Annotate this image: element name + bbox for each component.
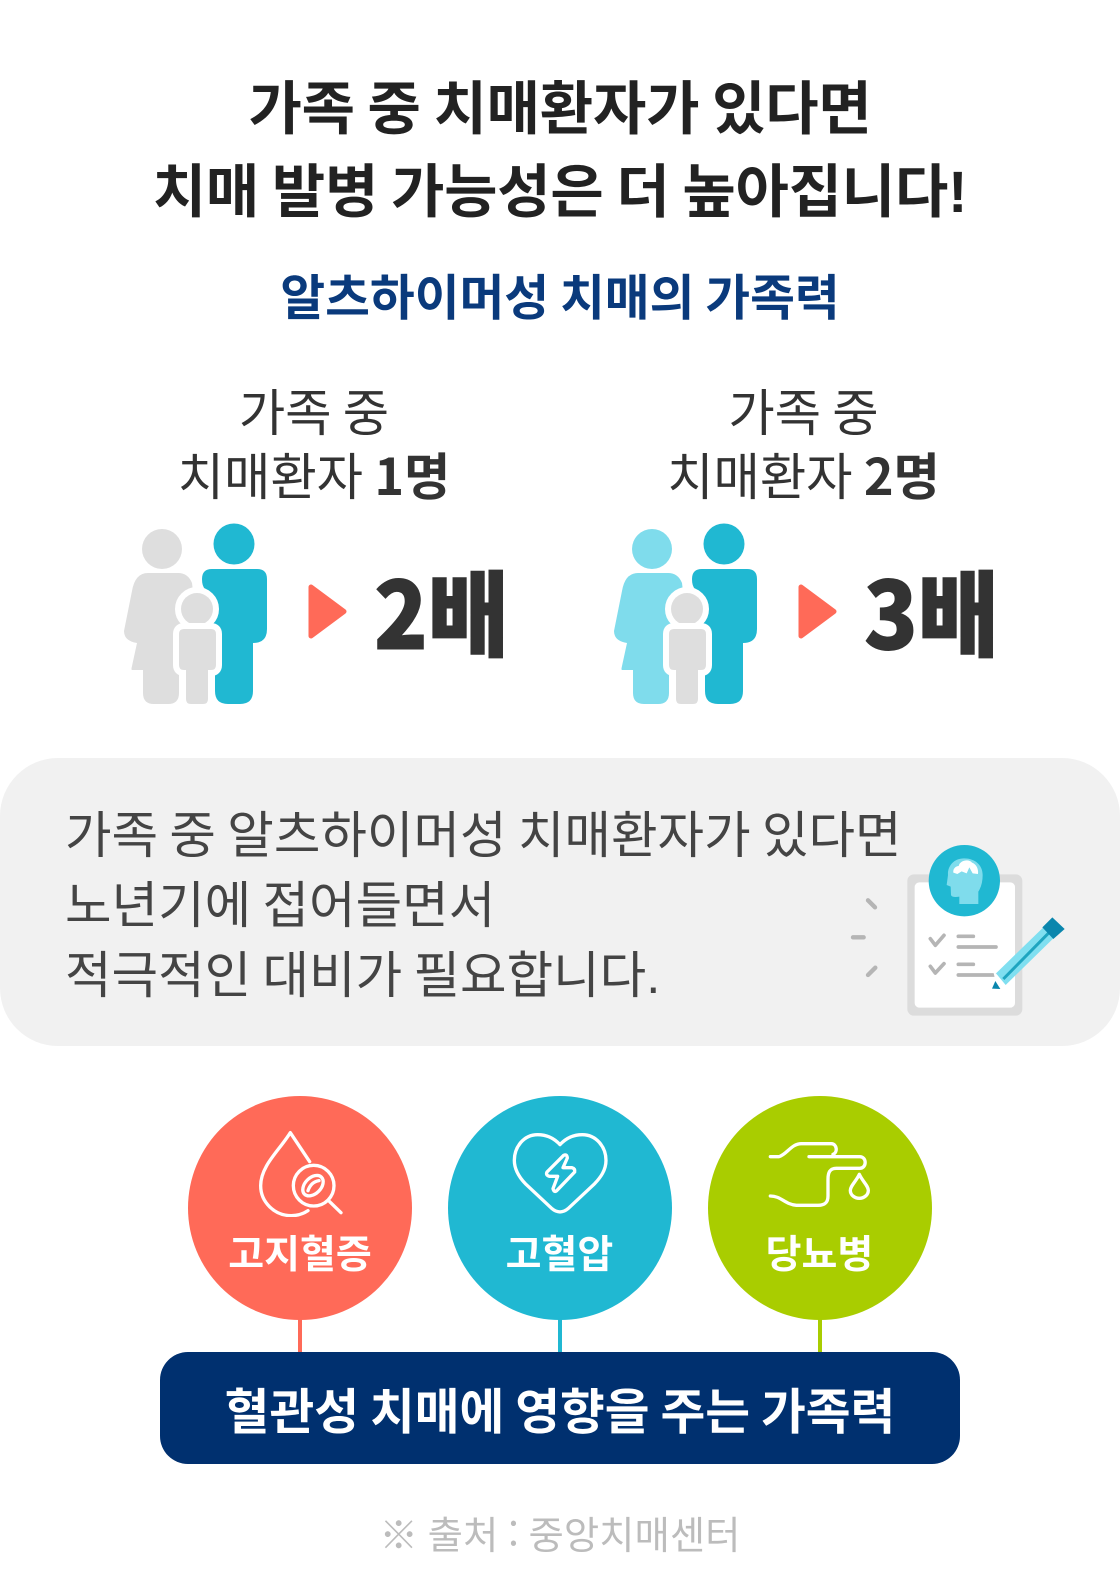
panel: two family members <box>614 385 999 704</box>
title: 치매 발병 가능성은 더 높아집니다! <box>153 160 967 225</box>
value: 2 times: 2배 <box>374 541 509 676</box>
heading: one patient <box>178 385 450 510</box>
arrow <box>308 584 346 638</box>
connector: diabetes <box>818 1317 822 1354</box>
advice text: 노년기에 접어들면서 <box>65 877 495 934</box>
title: 가족 중 치매환자가 있다면 <box>248 77 872 142</box>
label: 당뇨병 <box>766 1234 873 1277</box>
connector: hyperlipidemia <box>298 1317 302 1354</box>
label: 고지혈증 <box>228 1234 372 1277</box>
icon: finger with blood drop <box>768 1142 870 1207</box>
banner: vascular dementia family history: 혈관성 치매에 영향을 주는 가족력 <box>225 1386 895 1440</box>
title <box>153 77 967 225</box>
label: 고혈압 <box>506 1234 613 1277</box>
arrow <box>798 584 836 638</box>
advice text: 가족 중 알츠하이머성 치매환자가 있다면 <box>65 807 902 864</box>
panel: advice callout <box>0 758 1120 1046</box>
banner: vascular dementia family history <box>160 1352 960 1464</box>
circle: diabetes <box>708 1096 932 1320</box>
heading: two patients: 가족 중 <box>728 385 879 442</box>
connector: hypertension <box>558 1317 562 1354</box>
panel: one family member <box>124 385 509 704</box>
icon: family with father highlighted <box>124 524 267 704</box>
source note: ※ 출처 : 중앙치매센터 <box>380 1505 740 1561</box>
icon: clipboard with brain and pencil <box>850 845 1065 1016</box>
value: 3 times: 3배 <box>864 541 999 676</box>
heading: two patients: 치매환자 2명 <box>667 437 940 510</box>
icon: heart with lightning bolt <box>512 1133 608 1214</box>
advice text: 적극적인 대비가 필요합니다. <box>65 947 660 1004</box>
icon: blood drop with magnifier <box>259 1130 343 1217</box>
icon: family with both parents highlighted <box>614 524 757 704</box>
subtitle: 알츠하이머성 치매의 가족력 <box>280 272 840 326</box>
circle: hypertension <box>448 1096 672 1320</box>
heading: one patient: 치매환자 1명 <box>178 437 450 510</box>
circle: hyperlipidemia <box>188 1096 412 1320</box>
advice text <box>65 807 902 1004</box>
heading: one patient: 가족 중 <box>239 385 389 442</box>
heading: two patients <box>667 385 940 510</box>
